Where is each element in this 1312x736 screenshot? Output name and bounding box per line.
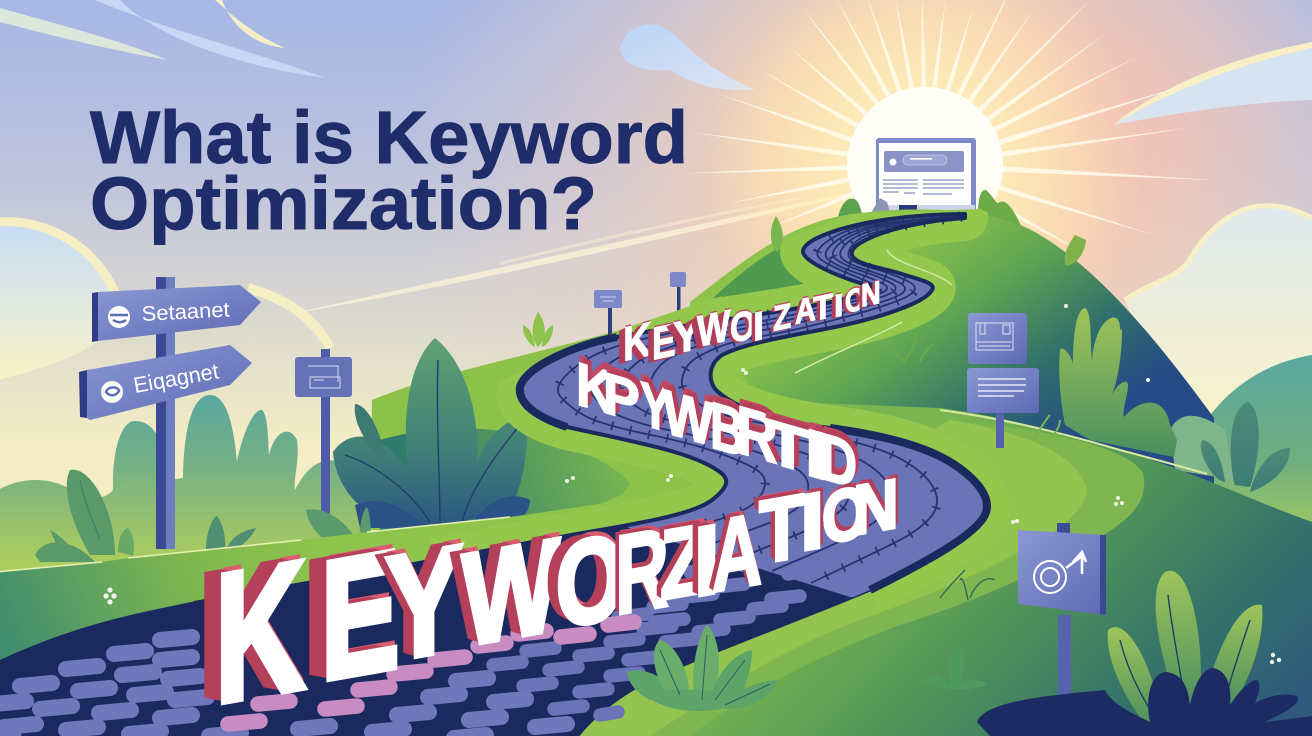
3D word: far stretch of the road bbox=[619, 274, 881, 372]
small sign 2 on ridge bbox=[670, 272, 686, 312]
far bush mound right bbox=[1170, 416, 1235, 480]
3D word: foreground of the road: N bbox=[853, 464, 899, 550]
3D word: far stretch of the road: O bbox=[730, 301, 756, 352]
3D word: far stretch of the road: I bbox=[834, 287, 843, 324]
distant right hill bbox=[1195, 355, 1312, 530]
big foreground stones, blue bbox=[0, 637, 567, 736]
3D word: far stretch of the road: N bbox=[861, 274, 881, 314]
sun glow bbox=[705, 0, 1145, 385]
road bed bbox=[0, 214, 987, 736]
hill sign stack bbox=[967, 313, 1039, 448]
foreground right grass bbox=[540, 400, 1312, 736]
bushes beside browser bbox=[838, 190, 1024, 232]
title bbox=[90, 96, 688, 245]
3D word: far stretch of the road: T bbox=[813, 287, 833, 329]
3D word: foreground of the road: A bbox=[712, 491, 762, 614]
3D word: middle stretch of the road: T bbox=[765, 406, 810, 488]
small sign 1 on ridge bbox=[594, 290, 622, 338]
stones further along, blue bbox=[493, 559, 814, 715]
lighter path band around road, outer bbox=[560, 420, 1144, 736]
sign: Setaanet: Setaanet bbox=[141, 298, 230, 326]
title: Optimization? bbox=[90, 162, 597, 245]
cloud: right bbox=[1125, 206, 1312, 440]
3D word: far stretch of the road: Y bbox=[673, 307, 701, 364]
ridge plants bbox=[523, 216, 1086, 347]
big leafy plant bbox=[333, 338, 530, 528]
grass band below ridge left bbox=[0, 478, 745, 705]
row gaps bbox=[558, 216, 962, 583]
3D word: far stretch of the road: A bbox=[795, 290, 816, 332]
small sign on post bbox=[295, 349, 352, 519]
3D word: middle stretch of the road: R bbox=[736, 391, 778, 479]
3D word: middle stretch of the road: W bbox=[663, 376, 713, 460]
dark inner area of left hump bbox=[380, 428, 630, 535]
road dark edge bbox=[194, 214, 987, 603]
cross gaps bbox=[558, 216, 962, 583]
hill shade patch left of road bbox=[707, 243, 820, 304]
foreground sign with target and arrow bbox=[1018, 523, 1106, 703]
sun rays bbox=[685, 0, 1215, 267]
3D word: far stretch of the road: W bbox=[697, 301, 730, 357]
3D word: far stretch of the road: Z bbox=[773, 296, 791, 339]
3D word: foreground of the road: E bbox=[321, 514, 399, 716]
3D word: foreground of the road: I bbox=[693, 502, 721, 618]
grass tufts right bbox=[890, 335, 1060, 690]
winding cobblestone road bbox=[0, 214, 987, 736]
road thick outer bends bbox=[520, 337, 987, 590]
pink-lit stones under the big word bbox=[228, 622, 634, 724]
left foreground plants bbox=[35, 470, 256, 562]
3D word: middle stretch of the road: I bbox=[804, 414, 828, 496]
small leaf plant by post bbox=[262, 507, 371, 558]
pale contour lines on the right hill bbox=[795, 250, 952, 373]
clouds: top left streaks bbox=[0, 0, 325, 78]
cloud: top centre bbox=[620, 24, 756, 90]
sign: Setaanet bbox=[92, 285, 261, 342]
3D word: middle stretch of the road: B bbox=[710, 387, 745, 471]
3D word: far stretch of the road: K bbox=[623, 313, 651, 372]
sign: Eiqagnet bbox=[79, 345, 252, 420]
post bbox=[156, 277, 175, 549]
upper road cobbles bbox=[524, 212, 983, 598]
browser window on the hilltop bbox=[872, 138, 976, 214]
3D word: far stretch of the road: O bbox=[845, 280, 865, 320]
3D word: foreground of the road: Z bbox=[660, 501, 708, 621]
3D word: far stretch of the road: E bbox=[652, 313, 676, 370]
3D word: foreground of the road: T bbox=[759, 476, 804, 584]
right hand bush bbox=[1059, 308, 1177, 457]
main hill bbox=[690, 209, 1214, 500]
sign: Eiqagnet: Eiqagnet bbox=[132, 358, 221, 398]
3D word: middle stretch of the road: D bbox=[820, 418, 857, 503]
3D word: middle stretch of the road bbox=[576, 349, 859, 503]
sun disc bbox=[847, 87, 1003, 243]
lighter path band around road, inner bbox=[560, 420, 1087, 736]
light ridge line right bbox=[940, 410, 1207, 474]
3D word: middle stretch of the road: P bbox=[603, 360, 640, 436]
3D word: far stretch of the road: I bbox=[753, 304, 764, 350]
far right plant bbox=[1201, 402, 1290, 492]
cloud: top right streak bbox=[1113, 42, 1312, 125]
3D word: foreground of the road bbox=[204, 464, 899, 736]
3D word: foreground of the road: Y bbox=[385, 512, 463, 694]
3D word: foreground of the road: I bbox=[800, 475, 824, 568]
3D word: middle stretch of the road: K bbox=[576, 349, 614, 428]
left hump hill bbox=[370, 296, 770, 530]
background bushes left bbox=[0, 395, 372, 590]
bright road verge bbox=[508, 209, 988, 494]
3D word: foreground of the road: W bbox=[462, 510, 560, 674]
small white flowers bbox=[103, 304, 1281, 664]
3D word: foreground of the road: O bbox=[822, 471, 869, 560]
3D word: foreground of the road: R bbox=[615, 504, 669, 639]
3D word: foreground of the road: O bbox=[556, 509, 625, 654]
title: What is Keyword bbox=[90, 96, 688, 179]
3D word: middle stretch of the road: Y bbox=[640, 368, 671, 446]
long pale sunbeams bbox=[285, 188, 871, 315]
signpost with two direction arrows bbox=[79, 277, 261, 549]
dark foreground foliage with leaves bbox=[977, 571, 1312, 736]
3D word: foreground of the road: K bbox=[215, 521, 305, 736]
foreground plant on grass bbox=[627, 625, 778, 711]
cloud: left bbox=[0, 222, 330, 380]
